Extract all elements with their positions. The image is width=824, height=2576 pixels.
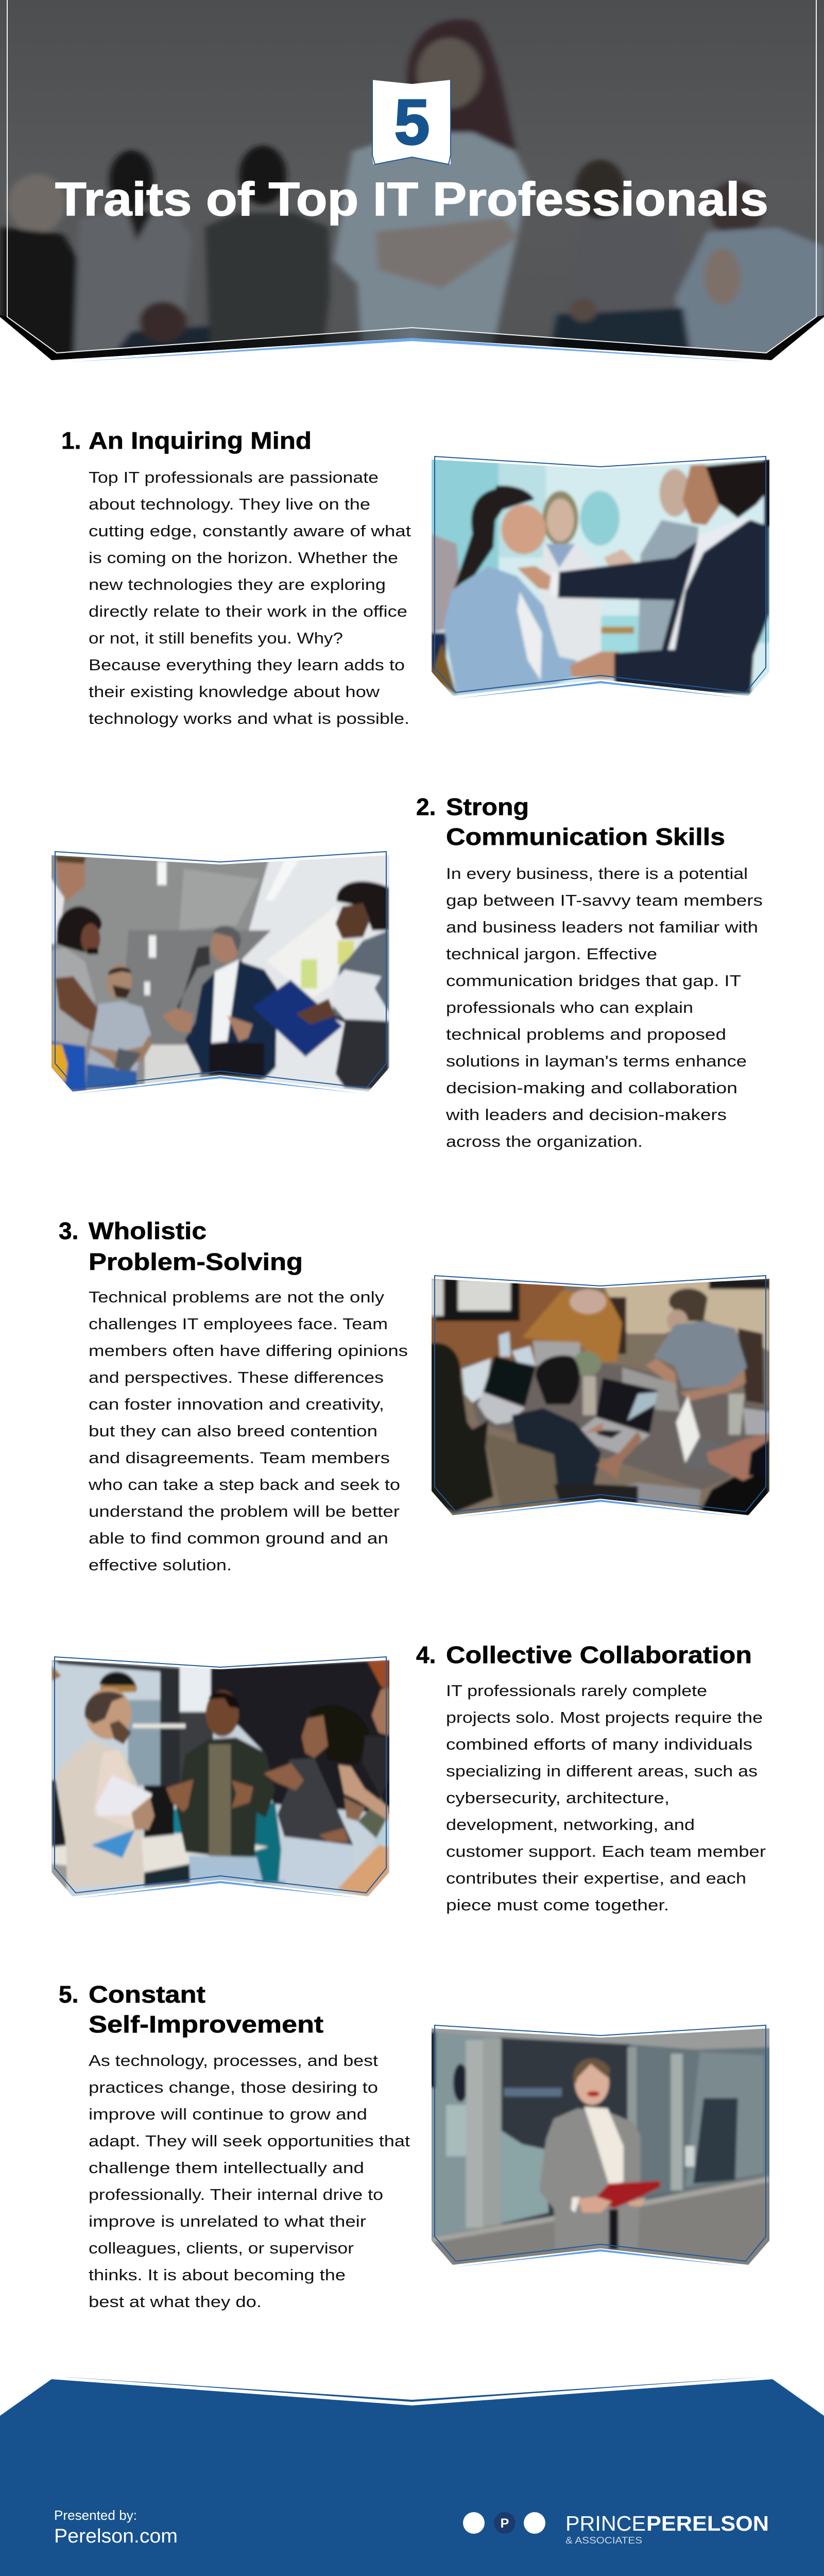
section 1 body text: new technologies they are exploring — [89, 575, 386, 594]
section 5 body text: professionally. Their internal drive to — [89, 2185, 383, 2204]
section 5 body text — [89, 2052, 410, 2311]
section 1 heading: 1. — [61, 427, 81, 454]
section 1: An Inquiring Mind — [61, 427, 411, 727]
logo left circle — [463, 2512, 485, 2534]
photo 2 blue frame — [55, 852, 386, 1088]
section 2 body text: technical jargon. Effective — [446, 945, 657, 963]
section 3 body text: members often have differing opinions — [89, 1342, 408, 1360]
presented by text — [54, 2507, 178, 2547]
logo center circle: P — [501, 2516, 509, 2531]
footer — [0, 2377, 824, 2576]
section 3 heading — [59, 1217, 303, 1275]
section 3 body text — [88, 1288, 408, 1574]
section 5 body text: adapt. They will seek opportunities that — [89, 2132, 410, 2150]
section 1 body text: about technology. They live on the — [89, 495, 370, 513]
section 4 body text: specializing in different areas, such as — [446, 1762, 758, 1780]
section 3 body text: effective solution. — [89, 1556, 232, 1574]
photo 5: woman holding a red folder — [432, 2025, 769, 2267]
section 4: Collective Collaboration — [416, 1641, 766, 1914]
section 3: Wholistic Problem-Solving — [59, 1217, 408, 1574]
section 5 body text: colleagues, clients, or supervisor — [89, 2239, 354, 2257]
section 3 body text: challenges IT employees face. Team — [89, 1315, 388, 1333]
header banner — [0, 0, 824, 371]
section 5 heading: Constant — [89, 1981, 205, 2008]
header white frame line — [7, 0, 816, 353]
section 2 body text: with leaders and decision-makers — [445, 1106, 727, 1124]
section 3 body text: who can take a step back and seek to — [88, 1476, 400, 1494]
section 5 body text: As technology, processes, and best — [89, 2052, 378, 2070]
section 4 body text — [446, 1682, 766, 1914]
logo wordmark: PERELSON — [646, 2512, 769, 2535]
logo wordmark: & ASSOCIATES — [565, 2535, 642, 2546]
section 2 heading: 2. — [416, 793, 436, 820]
logo wordmark — [565, 2512, 769, 2546]
section 3 body text: and perspectives. These differences — [89, 1368, 384, 1386]
logo center circle — [494, 2512, 516, 2534]
presented by text: Perelson.com — [54, 2526, 178, 2547]
photo 1 light blue accent — [455, 681, 741, 699]
header light blue accent — [67, 338, 757, 362]
logo — [463, 2512, 769, 2546]
section 1 heading: An Inquiring Mind — [89, 427, 312, 454]
header photo: team behind a standing woman — [0, 0, 824, 371]
photo 5 blue frame — [435, 2025, 766, 2261]
photo 4: colleagues talking in an office — [52, 1656, 389, 1899]
section 4 body text: combined efforts of many individuals — [446, 1735, 752, 1753]
section 2 body text — [445, 865, 763, 1150]
badge numeral: 5 — [394, 87, 430, 158]
section 4 body text: contributes their expertise, and each — [446, 1869, 746, 1887]
section 2 heading — [416, 793, 725, 850]
section 3 body text: can foster innovation and creativity, — [89, 1395, 384, 1413]
section 2 body text: technical problems and proposed — [446, 1025, 726, 1043]
section 4 body text: projects solo. Most projects require the — [446, 1708, 763, 1726]
section 1 body text: Because everything they learn adds to — [89, 656, 405, 674]
section 2 body text: communication bridges that gap. IT — [446, 972, 741, 990]
photo 2: manager talking with workers in a warehouse — [52, 851, 389, 1094]
number badge — [372, 80, 451, 164]
section 5 body text: improve will continue to grow and — [89, 2105, 367, 2123]
section 4 heading: Collective Collaboration — [446, 1641, 752, 1668]
section 3 body text: and disagreements. Team members — [89, 1449, 390, 1467]
section 3 heading: Wholistic — [89, 1217, 207, 1244]
section 4 body text: development, networking, and — [446, 1816, 695, 1834]
photo 1: handshake between colleagues — [432, 455, 769, 699]
section 2 body text: and business leaders not familiar with — [446, 918, 758, 936]
logo wordmark: PRINCE — [565, 2512, 646, 2535]
section 3 body text: but they can also breed contention — [89, 1422, 377, 1440]
section 4 body text: cybersecurity, architecture, — [446, 1789, 670, 1807]
section 5: Constant Self-Improvement — [59, 1981, 410, 2311]
section 5 heading: 5. — [59, 1981, 78, 2008]
section 5 body text: practices change, those desiring to — [89, 2078, 378, 2096]
section 3 body text: able to find common ground and an — [89, 1529, 388, 1547]
section 1 body text: their existing knowledge about how — [89, 683, 380, 701]
section 5 body text: best at what they do. — [89, 2293, 262, 2311]
section 1 body text: or not, it still benefits you. Why? — [89, 629, 343, 647]
section 5 heading: Self-Improvement — [89, 2011, 323, 2038]
photo 4 blue frame — [55, 1657, 386, 1893]
section 2 heading: Communication Skills — [446, 823, 725, 850]
section 5 body text: improve is unrelated to what their — [89, 2212, 366, 2230]
section 2 body text: gap between IT-savvy team members — [446, 891, 763, 909]
section 4 body text: customer support. Each team member — [446, 1842, 766, 1860]
section 1 body text: cutting edge, constantly aware of what — [89, 522, 411, 540]
section 1 body text: directly relate to their work in the office — [89, 602, 407, 620]
section 3 body text: Technical problems are not the only — [89, 1288, 385, 1306]
section 1 body text: technology works and what is possible. — [89, 709, 409, 727]
photo 2 light blue accent — [75, 1076, 360, 1094]
section 1 body text — [89, 468, 411, 727]
section 5 body text: thinks. It is about becoming the — [89, 2266, 346, 2284]
photo 3 light blue accent — [455, 1500, 741, 1517]
section 4 heading: 4. — [416, 1641, 436, 1668]
photo 3: team with laptops at a table — [432, 1275, 769, 1517]
photo 5 light blue accent — [455, 2249, 741, 2267]
photo 3 blue frame — [435, 1276, 766, 1512]
section 2 body text: across the organization. — [446, 1132, 643, 1150]
section 5 body text: challenge them intellectually and — [89, 2159, 364, 2177]
section 2 heading: Strong — [446, 793, 529, 820]
section 2 body text: professionals who can explain — [446, 998, 693, 1016]
section 4 body text: IT professionals rarely complete — [446, 1682, 707, 1700]
section 2: Strong Communication Skills — [416, 793, 763, 1150]
section 4 body text: piece must come together. — [446, 1896, 669, 1914]
section 1 body text: Top IT professionals are passionate — [89, 468, 379, 486]
footer accent line — [59, 2377, 765, 2402]
section 3 heading: 3. — [59, 1217, 78, 1244]
logo right circle — [524, 2512, 545, 2534]
footer blue background — [0, 2379, 824, 2576]
section 2 body text: decision-making and collaboration — [446, 1079, 737, 1097]
section 2 body text: solutions in layman's terms enhance — [446, 1052, 747, 1070]
presented by text: Presented by: — [54, 2507, 137, 2523]
photo 4 light blue accent — [75, 1881, 360, 1899]
section 1 body text: is coming on the horizon. Whether the — [89, 549, 398, 567]
header corner shading — [0, 315, 824, 360]
title: Traits of Top IT Professionals — [55, 173, 768, 226]
photo 1 blue frame — [435, 456, 766, 692]
section 3 body text: understand the problem will be better — [89, 1502, 400, 1520]
section 5 heading — [59, 1981, 323, 2038]
section 2 body text: In every business, there is a potential — [446, 865, 748, 883]
section 3 heading: Problem-Solving — [89, 1248, 303, 1275]
